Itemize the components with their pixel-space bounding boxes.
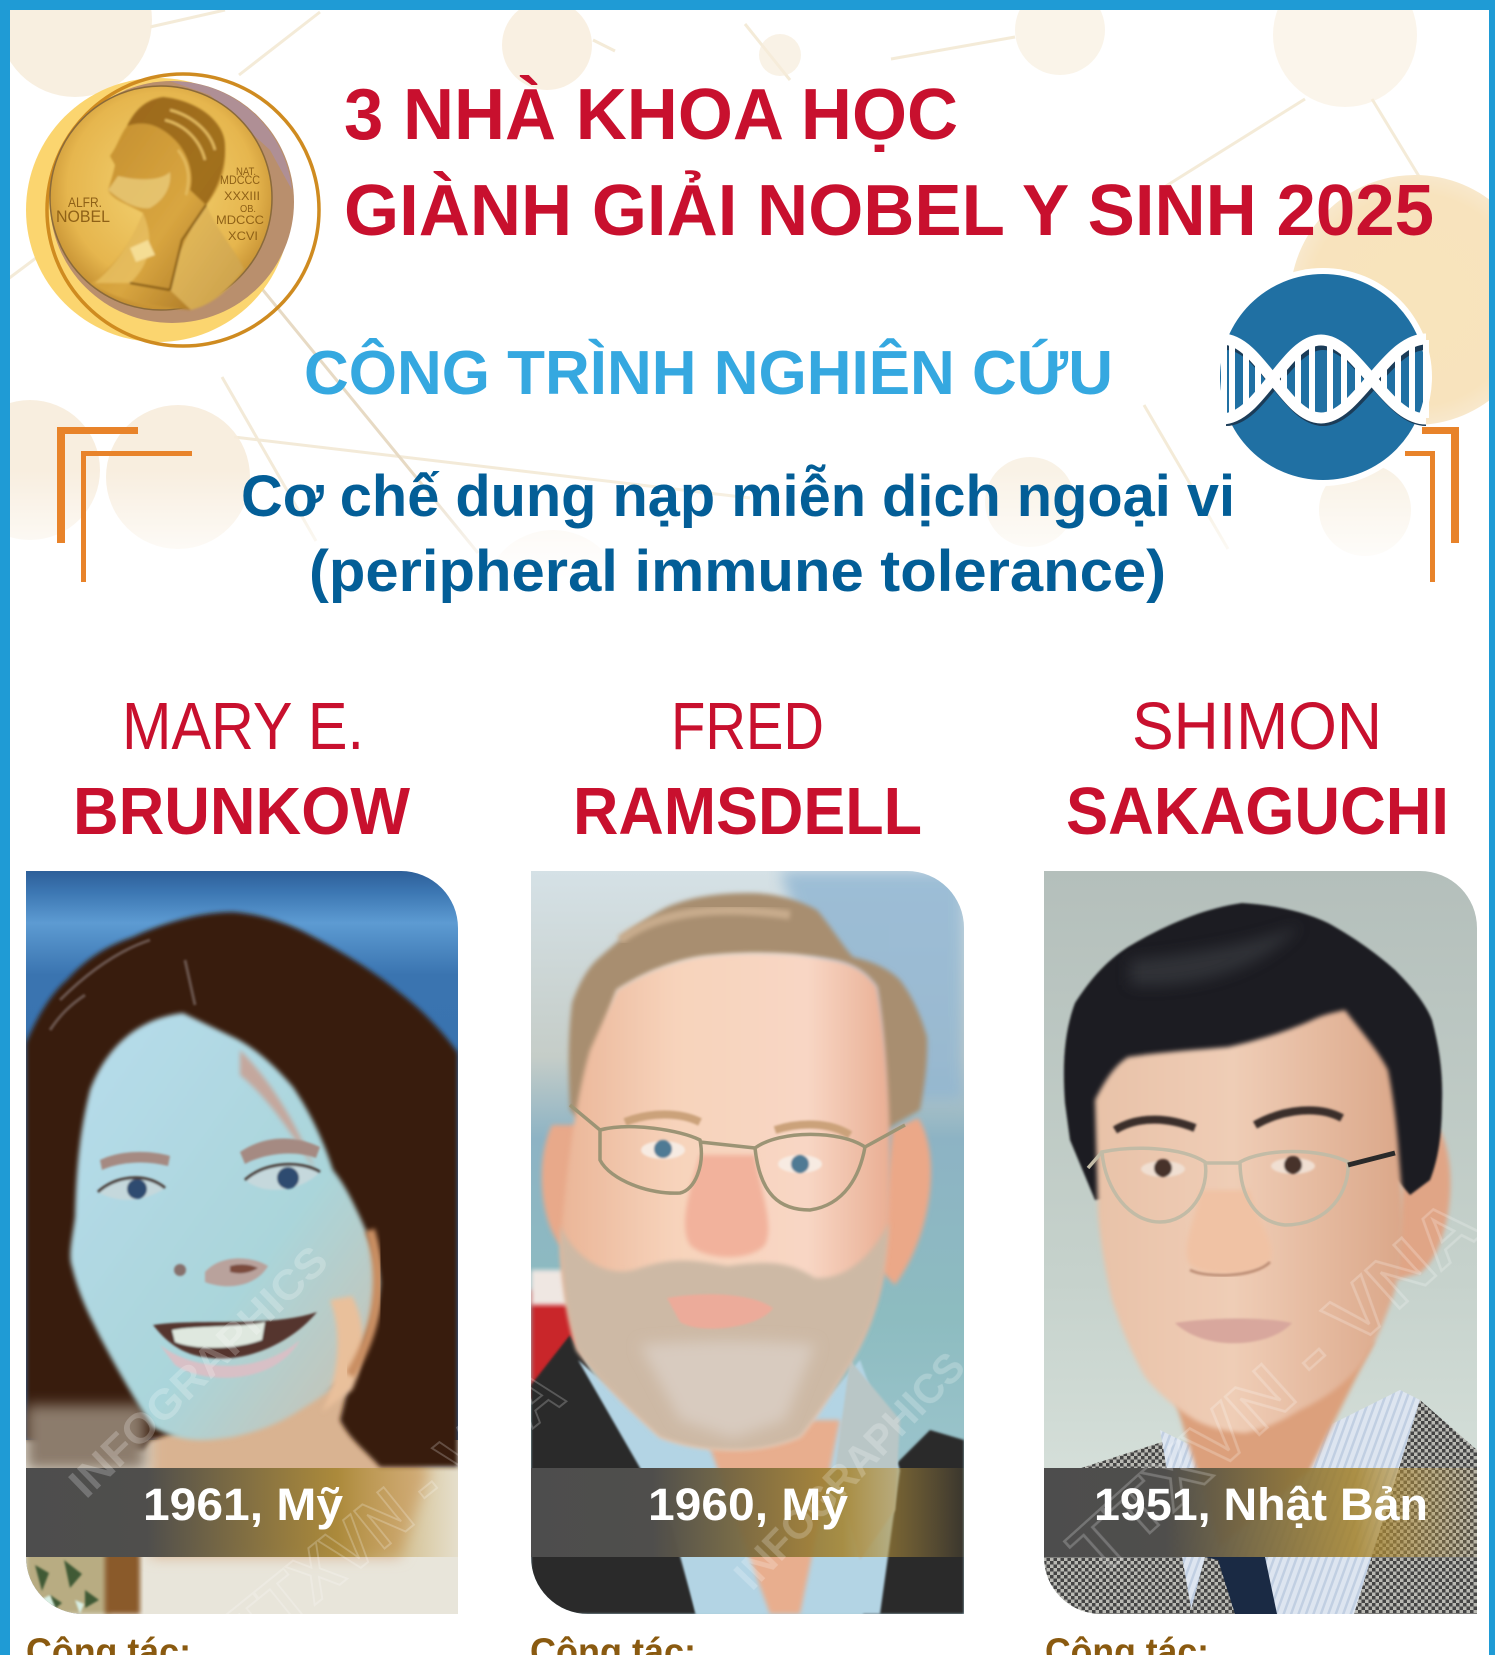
title: GIÀNH GIẢI NOBEL Y SINH 2025 [344, 170, 1434, 251]
medal inscriptions: NOBEL [56, 207, 110, 226]
orange bracket right [1405, 427, 1459, 582]
medal inscriptions: ALFR. [68, 194, 102, 210]
neck [700, 1420, 840, 1614]
icon: Nobel medal [26, 74, 319, 346]
research subject text: (peripheral immune tolerance) [309, 539, 1166, 604]
portrait: Shimon Sakaguchi [1044, 871, 1477, 1614]
background: watercolour molecule pattern [0, 0, 1495, 870]
medal inscriptions: MDCCC [216, 213, 264, 227]
name: Fred Ramsdell [573, 689, 922, 849]
neck [150, 1380, 430, 1557]
medal inscriptions: NAT. [236, 166, 256, 178]
heading: research work: CÔNG TRÌNH NGHIÊN CỨU [304, 339, 1113, 408]
name: Mary E. Brunkow: BRUNKOW [73, 774, 411, 849]
clothing [26, 1440, 458, 1614]
research subject text [241, 464, 1235, 604]
neck [1174, 1341, 1376, 1491]
watermarks: INFOGRAPHICS [725, 1343, 974, 1598]
face [1095, 1010, 1403, 1433]
ears [542, 1125, 585, 1245]
facial features [98, 1139, 320, 1378]
face [560, 954, 890, 1450]
eyes and eyebrows [1115, 1110, 1342, 1177]
beard [560, 1222, 889, 1450]
face [70, 1013, 380, 1440]
name: Mary E. Brunkow [73, 689, 411, 849]
portrait: Fred Ramsdell [531, 871, 964, 1614]
ear [1395, 1130, 1450, 1280]
caption band: 1951, Nhật Bản: 1951, Nhật Bản [1094, 1479, 1428, 1530]
shirt [1160, 1390, 1420, 1614]
nose and lips [1187, 1190, 1272, 1274]
name: Fred Ramsdell: FRED [671, 689, 824, 764]
title: 3 NHÀ KHOA HỌC [344, 75, 958, 155]
icon: DNA helix in blue circle [1214, 268, 1432, 486]
nose and lips [685, 1155, 768, 1257]
medal inscriptions: XXXIII [224, 189, 260, 203]
name: Fred Ramsdell: RAMSDELL [573, 774, 922, 849]
hair [569, 893, 927, 1130]
glasses [570, 1105, 905, 1210]
watermarks: TTXVN - VNA [1053, 1182, 1495, 1592]
name: Shimon Sakaguchi [1066, 689, 1449, 849]
medal portrait of Alfred Nobel [91, 97, 244, 310]
eyes and eyebrows [625, 1114, 850, 1173]
jacket [531, 1335, 964, 1614]
watermarks: INFOGRAPHICS [60, 1236, 337, 1506]
jacket [1044, 1400, 1477, 1614]
name: Shimon Sakaguchi: SAKAGUCHI [1066, 774, 1449, 849]
caption band: 1951, Nhật Bản [1044, 1468, 1477, 1557]
watermarks [60, 1182, 1495, 1655]
caption band: 1960, Mỹ: 1960, Mỹ [648, 1479, 848, 1530]
caption band: 1960, Mỹ [531, 1468, 964, 1557]
hair [1064, 903, 1442, 1200]
title [344, 75, 1434, 251]
hair [26, 912, 458, 1467]
caption band: 1961, Mỹ: 1961, Mỹ [143, 1479, 343, 1530]
medal inscriptions: MDCCC [220, 173, 260, 187]
research subject text: Cơ chế dung nạp miễn dịch ngoại vi [241, 464, 1235, 529]
shirt [578, 1360, 900, 1614]
name: Shimon Sakaguchi: SHIMON [1132, 689, 1382, 764]
glasses [1088, 1148, 1395, 1225]
medal inscriptions: XCVI [228, 229, 258, 243]
caption band: 1961, Mỹ [26, 1468, 458, 1557]
name: Mary E. Brunkow: MARY E. [122, 689, 364, 764]
orange bracket left [57, 427, 192, 582]
tie [1190, 1557, 1277, 1614]
medal inscriptions [56, 166, 264, 243]
portrait: Mary E. Brunkow [26, 871, 458, 1614]
medal inscriptions: OB. [240, 204, 256, 215]
